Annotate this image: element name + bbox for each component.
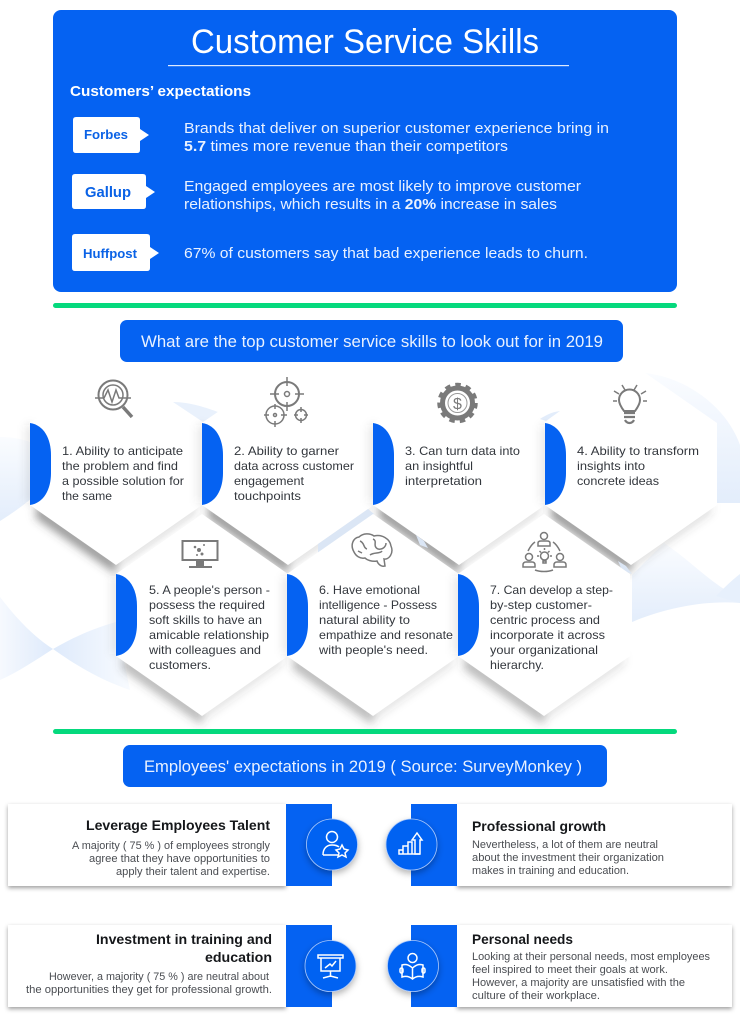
hexagon 2: garner data: engagement — [234, 474, 305, 488]
card: leverage employees talent: apply their talent and expertise. — [116, 866, 270, 878]
hexagon 7: step-by-step process — [455, 514, 630, 725]
icon: presentation board — [305, 940, 356, 992]
hexagon 3: data interpretation: interpretation — [405, 474, 482, 488]
icon: person with star — [306, 819, 358, 870]
hexagon 5: people's person: possess the required — [149, 598, 265, 612]
hexagon 4: transform insights — [542, 363, 717, 574]
card: professional growth: makes in training and education. — [472, 865, 629, 877]
card: investment in training and education: education — [205, 949, 272, 965]
card: leverage employees talent: Leverage Employees Talent — [86, 817, 270, 833]
icon: brain — [352, 534, 392, 566]
heading: employees' expectations — [123, 745, 607, 787]
heading: top customer service skills: What are the top customer service skills to look out for in 2019 — [141, 332, 603, 351]
card: leverage employees talent: A majority ( 75 % ) of employees strongly — [72, 840, 270, 852]
hexagon 6: emotional intelligence: natural ability to — [319, 613, 410, 627]
icon: gear with dollar sign — [439, 384, 476, 422]
hexagon 2: garner data: 2. Ability to garner — [234, 444, 339, 458]
text: Gallup statistic — [184, 178, 581, 213]
heading: top customer service skills — [120, 320, 623, 362]
hexagon 2: garner data: touchpoints — [234, 489, 301, 503]
pale wave strips in hexagon gaps — [318, 509, 632, 574]
heading: employees' expectations: Employees' expectations in 2019 ( Source: SurveyMonkey ) — [144, 757, 582, 776]
hexagon 1: anticipate: 1. Ability to anticipate — [62, 444, 183, 458]
hexagon 1: anticipate: the problem and find — [62, 459, 178, 473]
text: Forbes statistic: 5.7 times more revenue than their competitors — [184, 138, 508, 155]
text: Forbes statistic — [184, 120, 609, 155]
icon: monitor with data points — [182, 541, 218, 568]
panel: customers' expectations — [53, 10, 677, 292]
text: Gallup statistic: Engaged employees are most likely to improve customer — [184, 178, 581, 195]
card: professional growth: Nevertheless, a lot of them are neutral — [472, 839, 658, 851]
icon: gear with dollar sign: $ — [453, 396, 462, 413]
card: investment in training and education: However, a majority ( 75 % ) are neutral about — [49, 971, 269, 983]
card: personal needs: culture of their workplace. — [472, 990, 600, 1002]
icon: rising bars with arrow — [386, 819, 437, 870]
card: professional growth: Professional growth — [472, 818, 606, 834]
icon: magnifier with pulse — [95, 380, 132, 417]
hexagon 6: emotional intelligence: 6. Have emotional — [319, 583, 420, 597]
tag: Gallup: Gallup — [85, 184, 131, 201]
hexagon 5: people's person: soft skills to have an — [149, 613, 262, 627]
card: professional growth: about the investment their organization — [472, 852, 664, 864]
hexagon 3: data interpretation: an insightful — [405, 459, 473, 473]
hexagon 3: data interpretation — [370, 363, 545, 574]
card: professional growth — [386, 804, 732, 886]
card: leverage employees talent — [8, 804, 358, 886]
hexagon 2: garner data — [199, 363, 374, 574]
card: personal needs — [388, 925, 732, 1007]
hexagon 7: step-by-step process: hierarchy. — [490, 658, 544, 672]
text: Forbes statistic: Brands that deliver on superior customer experience bring in — [184, 120, 609, 137]
subheading: customers' expectations: Customers’ expectations — [70, 83, 251, 100]
tag: Forbes — [73, 117, 149, 153]
icon: person reading a book — [388, 940, 438, 992]
hexagon 7: step-by-step process: 7. Can develop a step- — [490, 583, 613, 597]
hexagon 7: step-by-step process: incorporate it across — [490, 628, 605, 642]
card: leverage employees talent: agree that they have opportunities to — [89, 853, 270, 865]
hexagon 4: transform insights: concrete ideas — [577, 474, 659, 488]
card: personal needs: Looking at their personal needs, most employees — [472, 951, 710, 963]
text: Huffpost statistic: 67% of customers say that bad experience leads to churn. — [184, 245, 588, 262]
text: Gallup statistic: relationships, which results in a 20% increase in sales — [184, 196, 557, 213]
hexagon 7: step-by-step process: your organizational — [490, 643, 598, 657]
card: personal needs: Personal needs — [472, 931, 573, 947]
card: investment in training and education: the opportunities they get for professional growth. — [26, 984, 272, 996]
hexagon 7: step-by-step process: centric process and — [490, 613, 600, 627]
icon: light bulb — [613, 385, 647, 423]
hexagon 5: people's person: customers. — [149, 658, 211, 672]
hexagon 6: emotional intelligence: intelligence - Possess — [319, 598, 437, 612]
icon: people around light bulb — [523, 532, 566, 572]
hexagon 7: step-by-step process: by-step customer- — [490, 598, 592, 612]
hexagon 1: anticipate: a possible solution for — [62, 474, 184, 488]
hexagon 6: emotional intelligence: with people's need. — [318, 643, 428, 657]
hexagon 5: people's person: 5. A people's person - — [149, 583, 270, 597]
tag: Huffpost — [72, 234, 159, 271]
hexagon 1: anticipate — [27, 363, 202, 574]
title: Customer Service Skills — [191, 23, 539, 61]
tag: Huffpost: Huffpost — [83, 246, 138, 261]
card: personal needs: feel inspired to meet their goals at work. — [472, 964, 668, 976]
card: investment in training and education — [8, 925, 356, 1007]
hexagon 3: data interpretation: 3. Can turn data into — [405, 444, 520, 458]
card: investment in training and education: Investment in training and — [96, 931, 272, 947]
hexagon 6: emotional intelligence — [284, 514, 459, 725]
hexagon 5: people's person: with colleagues and — [148, 643, 261, 657]
card: personal needs: However, a majority are unsatisfied with the — [472, 977, 685, 989]
tag: Forbes: Forbes — [84, 127, 128, 142]
hexagon 4: transform insights: 4. Ability to transform — [577, 444, 699, 458]
tag: Gallup — [72, 174, 155, 209]
hexagon 6: emotional intelligence: empathize and resonate — [319, 628, 453, 642]
icon: targets — [264, 377, 308, 427]
hexagon 1: anticipate: the same — [62, 489, 112, 503]
hexagon 2: garner data: data across customer — [234, 459, 354, 473]
hexagon 5: people's person: amicable relationship — [149, 628, 269, 642]
background waves — [0, 373, 740, 690]
hexagon 4: transform insights: insights into — [577, 459, 645, 473]
hexagon 5: people's person — [113, 514, 288, 725]
